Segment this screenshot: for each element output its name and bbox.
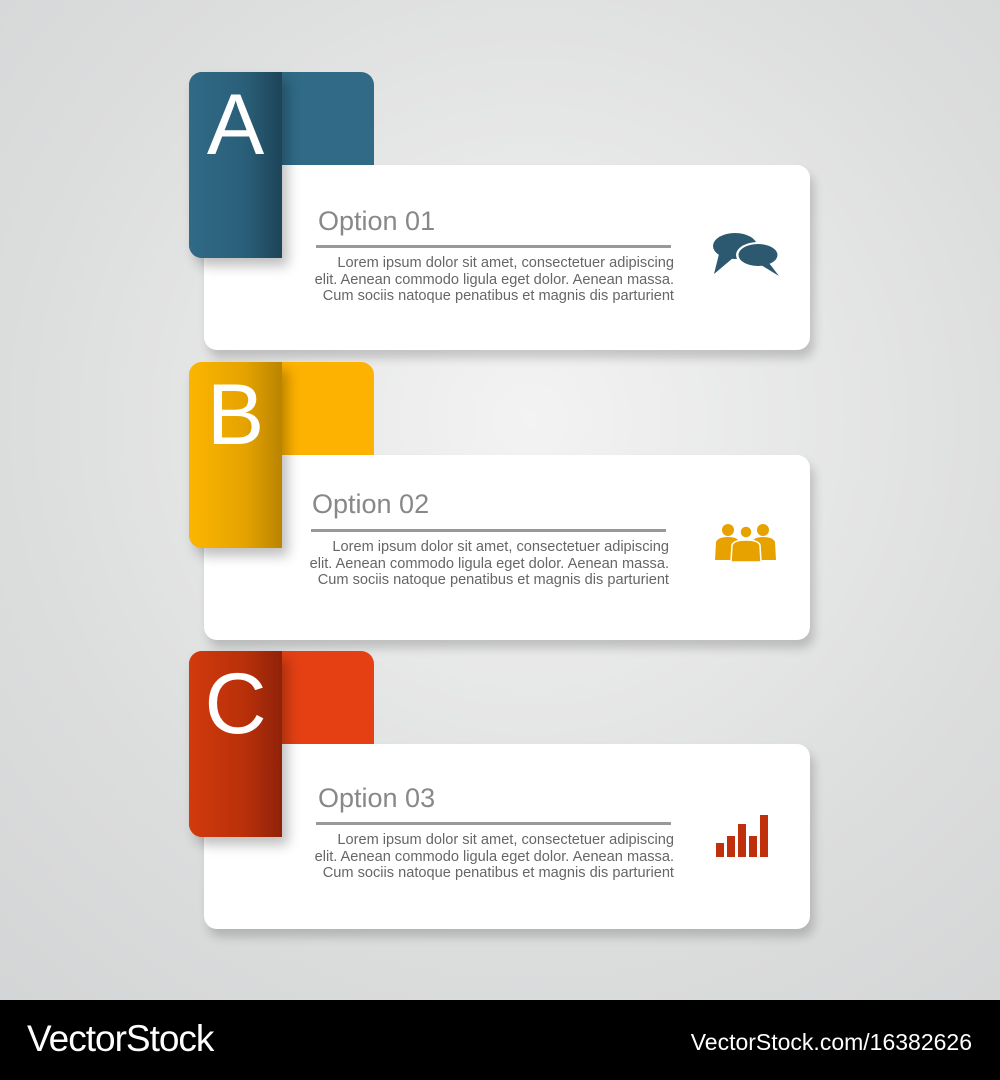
icon: speech bubbles [713,233,779,276]
text C: Lorem ipsum dolor sit amet, consectetuer adipiscing [337,832,674,848]
text B: Cum sociis natoque penatibus et magnis dis parturient [318,572,669,588]
footer logo: VectorStock [27,1018,213,1059]
card C [204,744,810,929]
icon: people [715,524,776,562]
tab B front with letter: B [207,367,264,463]
text C: Cum sociis natoque penatibus et magnis dis parturient [323,865,674,881]
panel: option C [189,651,818,941]
tab C front with letter: C [204,656,267,752]
text A [315,255,674,304]
text A: Lorem ipsum dolor sit amet, consectetuer adipiscing [337,255,674,271]
heading B: Option 02 [312,489,429,519]
heading A: Option 01 [318,206,435,236]
panel: option B [188,362,818,652]
footer url: VectorStock.com/16382626 [691,1029,972,1055]
text B [310,539,669,588]
text A: elit. Aenean commodo ligula eget dolor. Aenean massa. [315,272,674,288]
heading C: Option 03 [318,783,435,813]
text C [315,832,674,881]
tab A front with letter: A [207,77,264,173]
icon: bar chart [716,815,768,857]
tab B front with letter [189,362,282,548]
text B: Lorem ipsum dolor sit amet, consectetuer adipiscing [332,539,669,555]
tab C front with letter [189,651,282,837]
footer [0,1000,1000,1080]
card A [204,165,810,350]
panel: option A [189,72,818,362]
text C: elit. Aenean commodo ligula eget dolor. Aenean massa. [315,848,674,864]
text A: Cum sociis natoque penatibus et magnis dis parturient [323,288,674,304]
tab A back [189,72,374,258]
tab A front with letter [189,72,282,258]
card B [204,455,810,640]
text B: elit. Aenean commodo ligula eget dolor. Aenean massa. [310,556,669,572]
